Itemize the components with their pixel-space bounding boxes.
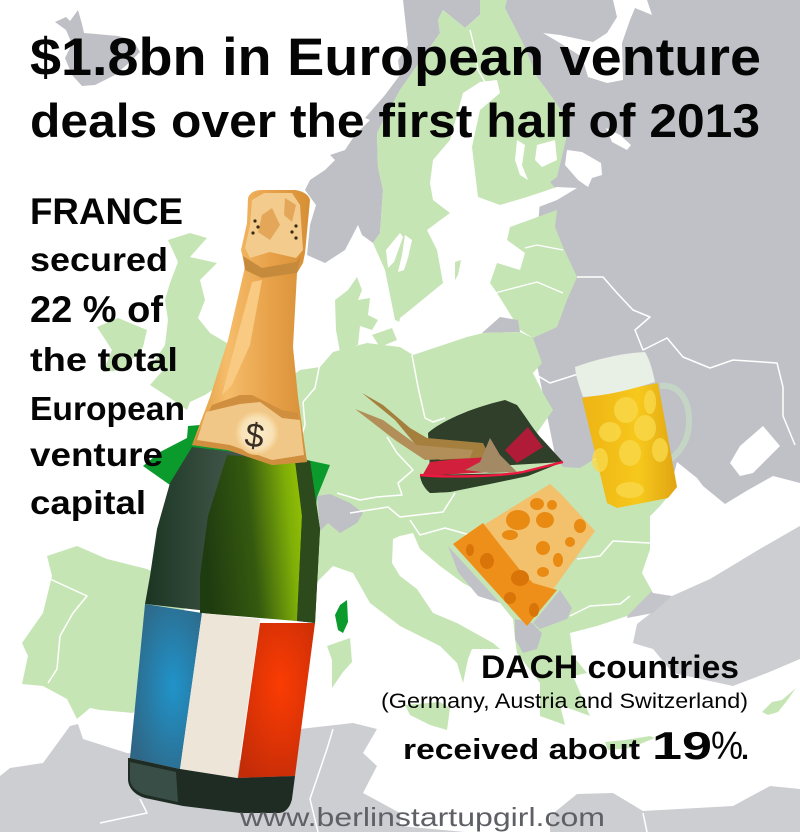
DACH text block: DACH countries (481, 649, 739, 685)
bottle base (128, 758, 295, 813)
pheasant feather long (362, 393, 490, 460)
map: Switzerland (317, 494, 363, 533)
website credit: www.berlinstartupgirl.com (239, 802, 605, 832)
France text block (30, 191, 185, 521)
map: Gotland (455, 260, 461, 280)
label: red stripe (238, 623, 315, 778)
map: Crete (605, 736, 655, 750)
France text block: secured (30, 241, 168, 278)
cheese holes (502, 498, 586, 577)
map: North Africa east (550, 786, 800, 832)
map: France (143, 425, 330, 560)
map: Cyprus (762, 688, 796, 715)
map: Denmark (335, 277, 378, 352)
map: Kaliningrad (482, 317, 520, 333)
DACH text block: . (741, 734, 749, 766)
heading: deals over the first half of 2013 (30, 94, 760, 147)
foil neck highlight (222, 280, 262, 395)
map: Lake Ladoga (565, 150, 602, 187)
map: White Sea (543, 0, 652, 83)
map: Black Sea (642, 462, 800, 594)
map: Sardinia (327, 638, 352, 688)
map: North Africa west (0, 723, 465, 832)
bottle base highlight (130, 762, 178, 802)
hat crown (428, 400, 563, 470)
icon: cheese wedge (453, 484, 595, 626)
cheese rind holes (466, 544, 539, 617)
icon: beer mug (575, 352, 689, 508)
hat ribbon (505, 427, 543, 463)
DACH text block (381, 649, 749, 768)
cheese rind (453, 523, 557, 626)
foil collar cream (197, 402, 304, 460)
bottle glass left (145, 447, 320, 623)
foil cap highlight (245, 193, 303, 258)
map: Albania (515, 619, 542, 653)
hat red piping (420, 462, 563, 476)
map: Iceland (55, 10, 140, 86)
heading (30, 28, 761, 147)
map: Sicily (405, 702, 450, 730)
bottle right shade (295, 461, 320, 623)
small feather (465, 438, 517, 473)
foil neck (192, 190, 310, 465)
map: continental Europe (190, 332, 677, 725)
France text block: the total (30, 341, 178, 378)
map: Sweden and Finland (373, 0, 570, 330)
map: Estonia, Latvia, Lithuania (490, 210, 577, 338)
map: Sea of Azov (730, 426, 780, 476)
foil cap mottling (258, 198, 296, 240)
label: blue stripe (130, 604, 202, 769)
map: Great Britain (150, 233, 227, 410)
foil collar band (192, 395, 307, 465)
map: country borders (48, 277, 795, 832)
map: Baltic borders (495, 245, 563, 293)
mug handle (660, 386, 689, 460)
beer glass (582, 383, 677, 508)
pheasant feather second (355, 409, 473, 460)
bottle glass highlight (200, 455, 302, 621)
map: Finnish lakes (515, 140, 557, 180)
icon: champagne bottle with French flag label (128, 190, 320, 813)
hat brim (420, 462, 563, 493)
map: Bosnia (448, 546, 500, 603)
cheese top (453, 484, 595, 626)
foil perforations (251, 219, 298, 240)
foil neck ring (243, 256, 301, 278)
DACH text block: 19 (652, 725, 712, 768)
icon: Tyrolean hat with feather (355, 393, 563, 493)
DACH text block: (Germany, Austria and Switzerland) (381, 690, 748, 713)
map: Swedish lakes (386, 233, 412, 272)
label: white stripe (180, 613, 260, 778)
hat red band (422, 456, 490, 476)
map: Serbia and Macedonia (533, 590, 572, 629)
map: Russia, Belarus, Ukraine (500, 0, 800, 560)
dollar emblem: $ (243, 416, 267, 456)
seal (235, 411, 279, 455)
map: Iberian Peninsula (22, 546, 190, 719)
map: Turkey and Middle East (633, 526, 800, 686)
heading: $1.8bn in European venture (30, 28, 761, 87)
beer foam (575, 352, 655, 397)
map: Baltic Sea and Gulfs (395, 80, 577, 353)
France text block: FRANCE (30, 191, 183, 232)
France text block: capital (30, 484, 146, 521)
map: Sweden-Finland border (470, 30, 485, 82)
France text block: venture (30, 436, 163, 473)
France text block: European (30, 390, 185, 427)
France text block: 22 % of (30, 289, 164, 330)
map: European Turkey (622, 586, 672, 618)
beer dimples (592, 390, 668, 498)
map: Danish islands (372, 328, 397, 347)
map: Lake Onega (606, 128, 631, 150)
DACH text block: % (711, 725, 743, 768)
map: Norway (305, 0, 482, 263)
map: Corsica (335, 600, 348, 633)
map: Ireland (97, 318, 147, 372)
DACH text block: received about (403, 734, 640, 766)
